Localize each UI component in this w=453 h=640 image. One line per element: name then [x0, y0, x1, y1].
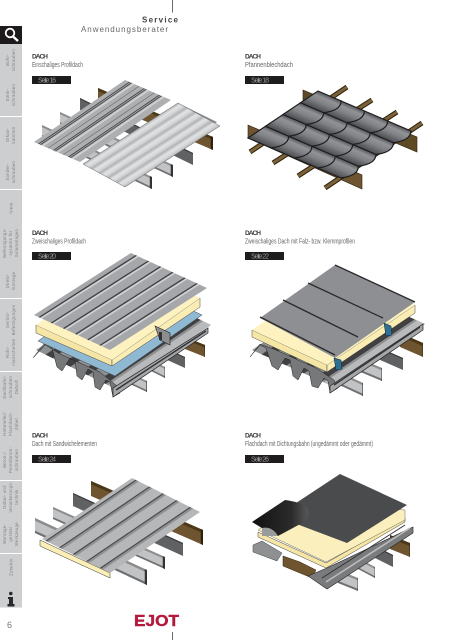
sidebar label: Halteteller: dübel: [14, 418, 19, 430]
panel: Flachdach mit Dichtungsbahn: [245, 432, 413, 591]
heading: Service: Service: [142, 16, 179, 24]
icon: membrane roll: [252, 500, 308, 536]
panel: Zweischaliges Profildach: [32, 230, 211, 397]
illustration: flat roof with membrane: [252, 474, 413, 591]
sidebar label: Rohrmanschetten: Rohr-: [5, 346, 10, 358]
sidebar label: Sonderschrauben: schrauben: [11, 161, 16, 183]
sidebar label: Direktmontage: Direkt-: [5, 274, 10, 288]
description: Pfannenblechdach: [245, 62, 293, 69]
search tab: [0, 26, 22, 44]
sidebar grey tabs: [0, 44, 22, 608]
sidebar label: Befestigungssysteme: Solaranlagen: [14, 228, 19, 257]
heading: DACH: [245, 230, 261, 237]
sidebar label: Niete: Niete: [8, 202, 14, 214]
sidebar label: Direktmontage: montage: [11, 271, 16, 290]
sidebar label: Dübel- und Verankerungstechnik: Dübel- und: [2, 485, 7, 509]
logo: EJOT: EJOT: [134, 613, 179, 630]
illustration: standing seam roof: [250, 265, 425, 396]
sidebar label: Orkankalotten: Orkan-: [5, 128, 10, 142]
page tag: [245, 76, 284, 84]
sidebar navigation: [0, 26, 22, 608]
page number: 6: [7, 620, 12, 630]
sidebar label: Orkankalotten: kalotten: [11, 126, 16, 144]
heading: DACH: [245, 54, 261, 60]
description: Einschaliges Profildach: [32, 62, 83, 69]
description: Flachdach mit Dichtungsbahn (ungedämmt oder gedämmt): [245, 441, 373, 448]
sidebar label: Gerüstbefestigungen: Befestigungen: [11, 304, 16, 335]
description: Zweischaliges Profildach: [32, 238, 86, 246]
panel: Dach mit Sandwichelementen: [32, 432, 203, 585]
sidebar label: Beton- und Porenbetonschrauben: schrauben: [14, 449, 19, 471]
page tag: [32, 455, 71, 464]
sidebar label: Montagegeräte: geräte/: [8, 526, 13, 542]
sidebar label: Montagegeräte: Werkzeuge: [14, 522, 19, 546]
sidebar label: Steinschrauben: schrauben: [11, 84, 16, 106]
sidebar label: Montagegeräte: Montage-: [2, 524, 7, 544]
sidebar label: Bohrschrauben: Bohr-: [5, 54, 10, 66]
sidebar label: Dübel- und Verankerungstechnik: Verankerungs-: [8, 481, 13, 513]
sidebar label: Befestigungssysteme: systeme für: [8, 230, 13, 255]
page tag: Seite 24: [38, 456, 56, 464]
icon: steel clip: [155, 326, 170, 345]
sidebar label: Bohrschrauben: schrauben: [11, 49, 16, 71]
sidebar label: Dachbahnschrauben: schrauben: [8, 376, 13, 398]
page tag: Seite 26: [251, 456, 269, 464]
sidebar label: Sonderschrauben: Sonder-: [5, 164, 10, 180]
heading: DACH: [32, 54, 48, 60]
heading: DACH: [245, 432, 261, 440]
illustration: sandwich panel roof: [35, 478, 203, 585]
sidebar label: Zubehör: Zubehör: [8, 558, 14, 576]
illustration: tile-effect roof sheet: [248, 87, 422, 189]
page tag: [245, 252, 284, 260]
page tag: Seite 16: [38, 78, 56, 84]
description: Dach mit Sandwichelementen: [32, 441, 97, 448]
heading: Anwendungsberater: Anwendungsberater: [81, 25, 168, 34]
header: [81, 0, 179, 34]
illustration: profiled and corrugated sheets on beams: [34, 80, 220, 189]
sidebar label: Steinschrauben: Stein-: [5, 89, 10, 101]
page tag: Seite 20: [38, 254, 56, 260]
icon: blue clips: [334, 323, 392, 370]
page tag: [32, 76, 71, 84]
panel: Pfannenblechdach: [245, 54, 422, 189]
sidebar label: Befestigungssysteme: Befestigungs-: [2, 228, 7, 258]
page tag: Seite 18: [251, 78, 269, 84]
page tag: [245, 455, 284, 464]
sidebar label: Halteteller: Flachdach-: [8, 412, 13, 436]
icon: information: [8, 592, 14, 606]
panel: Zweischaliges Dach mit Falzprofilen: [245, 230, 425, 396]
sidebar label: Dachbahnschrauben: Dabo®: [14, 379, 19, 394]
heading: DACH: [32, 432, 48, 440]
sidebar label: Beton- und Porenbetonschrauben: Porenbeton-: [8, 447, 13, 473]
page tag: Seite 22: [251, 254, 269, 260]
illustration: double-skin roof layers: [33, 253, 211, 397]
sidebar label: Gerüstbefestigungen: Gerüst-: [5, 312, 10, 328]
sidebar label: Dübel- und Verankerungstechnik: technik: [14, 489, 19, 505]
heading: DACH: [32, 230, 48, 237]
sidebar label: Rohrmanschetten: manschetten: [11, 338, 16, 366]
sidebar label: Beton- und Porenbetonschrauben: Beton-/: [2, 452, 7, 468]
sidebar label: Halteteller: Halteteller/: [2, 412, 7, 436]
description: Zweischaliges Dach mit Falz- bzw. Klemmprofilen: [245, 238, 355, 246]
sidebar label: Dachbahnschrauben: Dachbahn-: [2, 375, 7, 399]
page tag: [32, 252, 71, 260]
panel: Einschaliges Profildach: [32, 54, 220, 189]
